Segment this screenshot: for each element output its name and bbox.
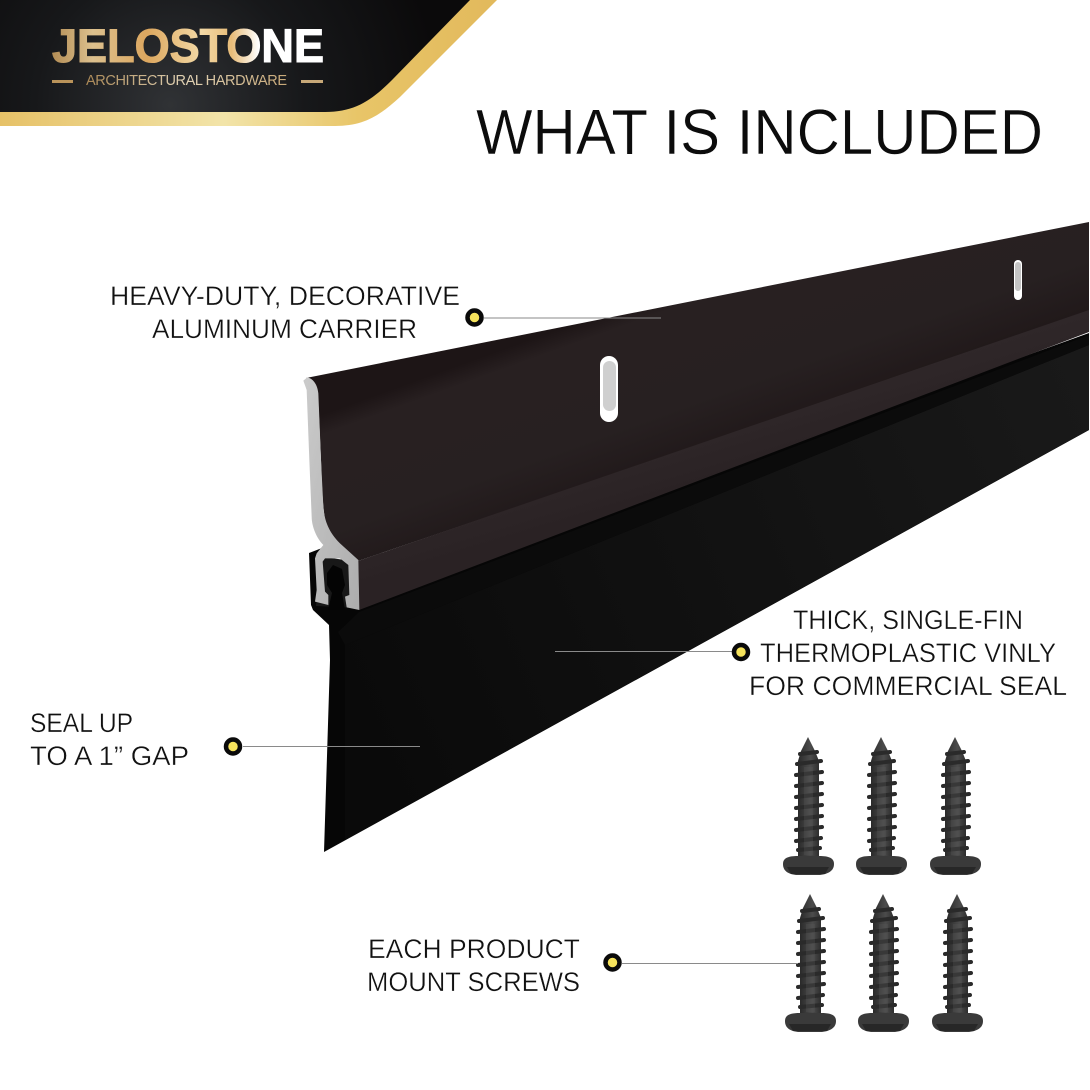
gap label: SEAL UP (30, 708, 133, 738)
screws leader line (622, 962, 798, 964)
vinyl fin (309, 333, 1089, 852)
logo tagline: ARCHITECTURAL HARDWARE (86, 73, 287, 89)
aluminum end profile (303, 377, 359, 610)
screws marker dot (606, 956, 620, 970)
screw bottom 3 (932, 894, 983, 1032)
screws label (367, 934, 580, 997)
mounting slot left (600, 356, 618, 422)
carrier leader line (484, 317, 661, 319)
gap label (30, 708, 189, 771)
gold ribbon (0, 0, 497, 126)
carrier label: HEAVY-DUTY, DECORATIVE (110, 281, 460, 311)
vinyl T-bulb (327, 565, 345, 610)
title: WHAT IS INCLUDED (476, 96, 1043, 168)
door sweep product (303, 222, 1089, 852)
logo rule left (52, 80, 73, 83)
screws label: MOUNT SCREWS (367, 967, 580, 997)
vinyl label: THERMOPLASTIC VINLY (760, 638, 1056, 668)
screw bottom 1 (785, 894, 836, 1032)
fin retainer strip (338, 335, 1089, 645)
carrier marker dot (468, 310, 482, 324)
callout: gap seal (30, 708, 420, 771)
screws label: EACH PRODUCT (368, 934, 580, 964)
logo rule right (301, 80, 323, 83)
mounting slot right (1014, 260, 1022, 300)
vinyl channel interior (316, 556, 358, 608)
vinyl label (749, 605, 1067, 701)
vinyl leader line (555, 650, 732, 652)
callout: aluminum carrier (110, 281, 661, 344)
gap marker dot (226, 740, 240, 754)
screw bottom 2 (858, 894, 909, 1032)
mounting screws set (783, 737, 983, 1032)
carrier lower band (358, 310, 1089, 610)
black banner shape (0, 0, 470, 112)
vinyl label: FOR COMMERCIAL SEAL (749, 671, 1067, 701)
vinyl marker dot (734, 645, 748, 659)
fin face (345, 345, 1089, 840)
gap leader line (243, 746, 420, 748)
vinyl label: THICK, SINGLE-FIN (793, 605, 1023, 635)
carrier label: ALUMINUM CARRIER (152, 314, 417, 344)
header logo banner (0, 0, 497, 126)
logo wordmark: JELOSTONE (52, 19, 324, 72)
screw top 1 (783, 737, 834, 875)
gap label: TO A 1” GAP (30, 741, 189, 771)
carrier label (110, 281, 460, 344)
screw top 2 (856, 737, 907, 875)
callout: vinyl fin (555, 605, 1067, 701)
carrier face (306, 222, 1089, 561)
screw top 3 (930, 737, 981, 875)
callout: screws (367, 934, 798, 997)
